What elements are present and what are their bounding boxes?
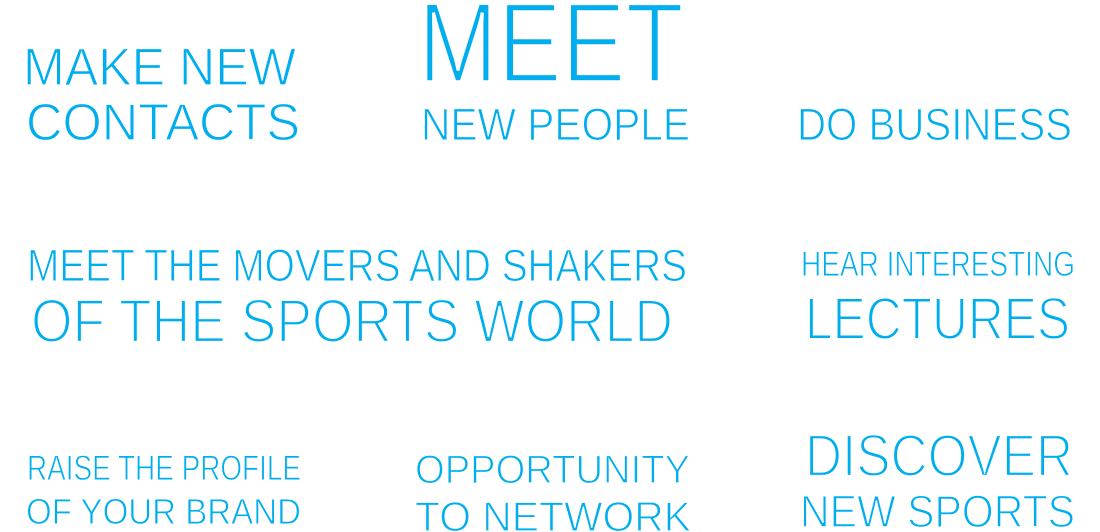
text block: raise the profile of your brand: [26, 449, 301, 532]
text block: opportunity to network: OPPORTUNITY: [415, 448, 690, 492]
heading: meet new people: NEW PEOPLE: [421, 99, 690, 150]
text block: raise the profile of your brand: RAISE THE PROFILE: [27, 449, 301, 488]
text block: meet the movers and shakers: [27, 240, 687, 355]
text block: do business: DO BUSINESS: [797, 99, 1072, 150]
heading: meet new people: [418, 0, 690, 150]
text block: hear interesting lectures: [801, 245, 1075, 352]
text block: meet the movers and shakers: MEET THE MOVERS AND SHAKERS: [27, 240, 687, 291]
text block: raise the profile of your brand: OF YOUR BRAND: [26, 491, 301, 532]
text block: make new contacts: CONTACTS: [26, 94, 300, 152]
text block: meet the movers and shakers: OF THE SPORTS WORLD: [31, 287, 673, 355]
text block: discover new sports: [800, 423, 1075, 532]
text block: make new contacts: MAKE NEW: [23, 38, 296, 97]
text block: opportunity to network: [415, 448, 691, 532]
text block: make new contacts: [23, 38, 300, 152]
